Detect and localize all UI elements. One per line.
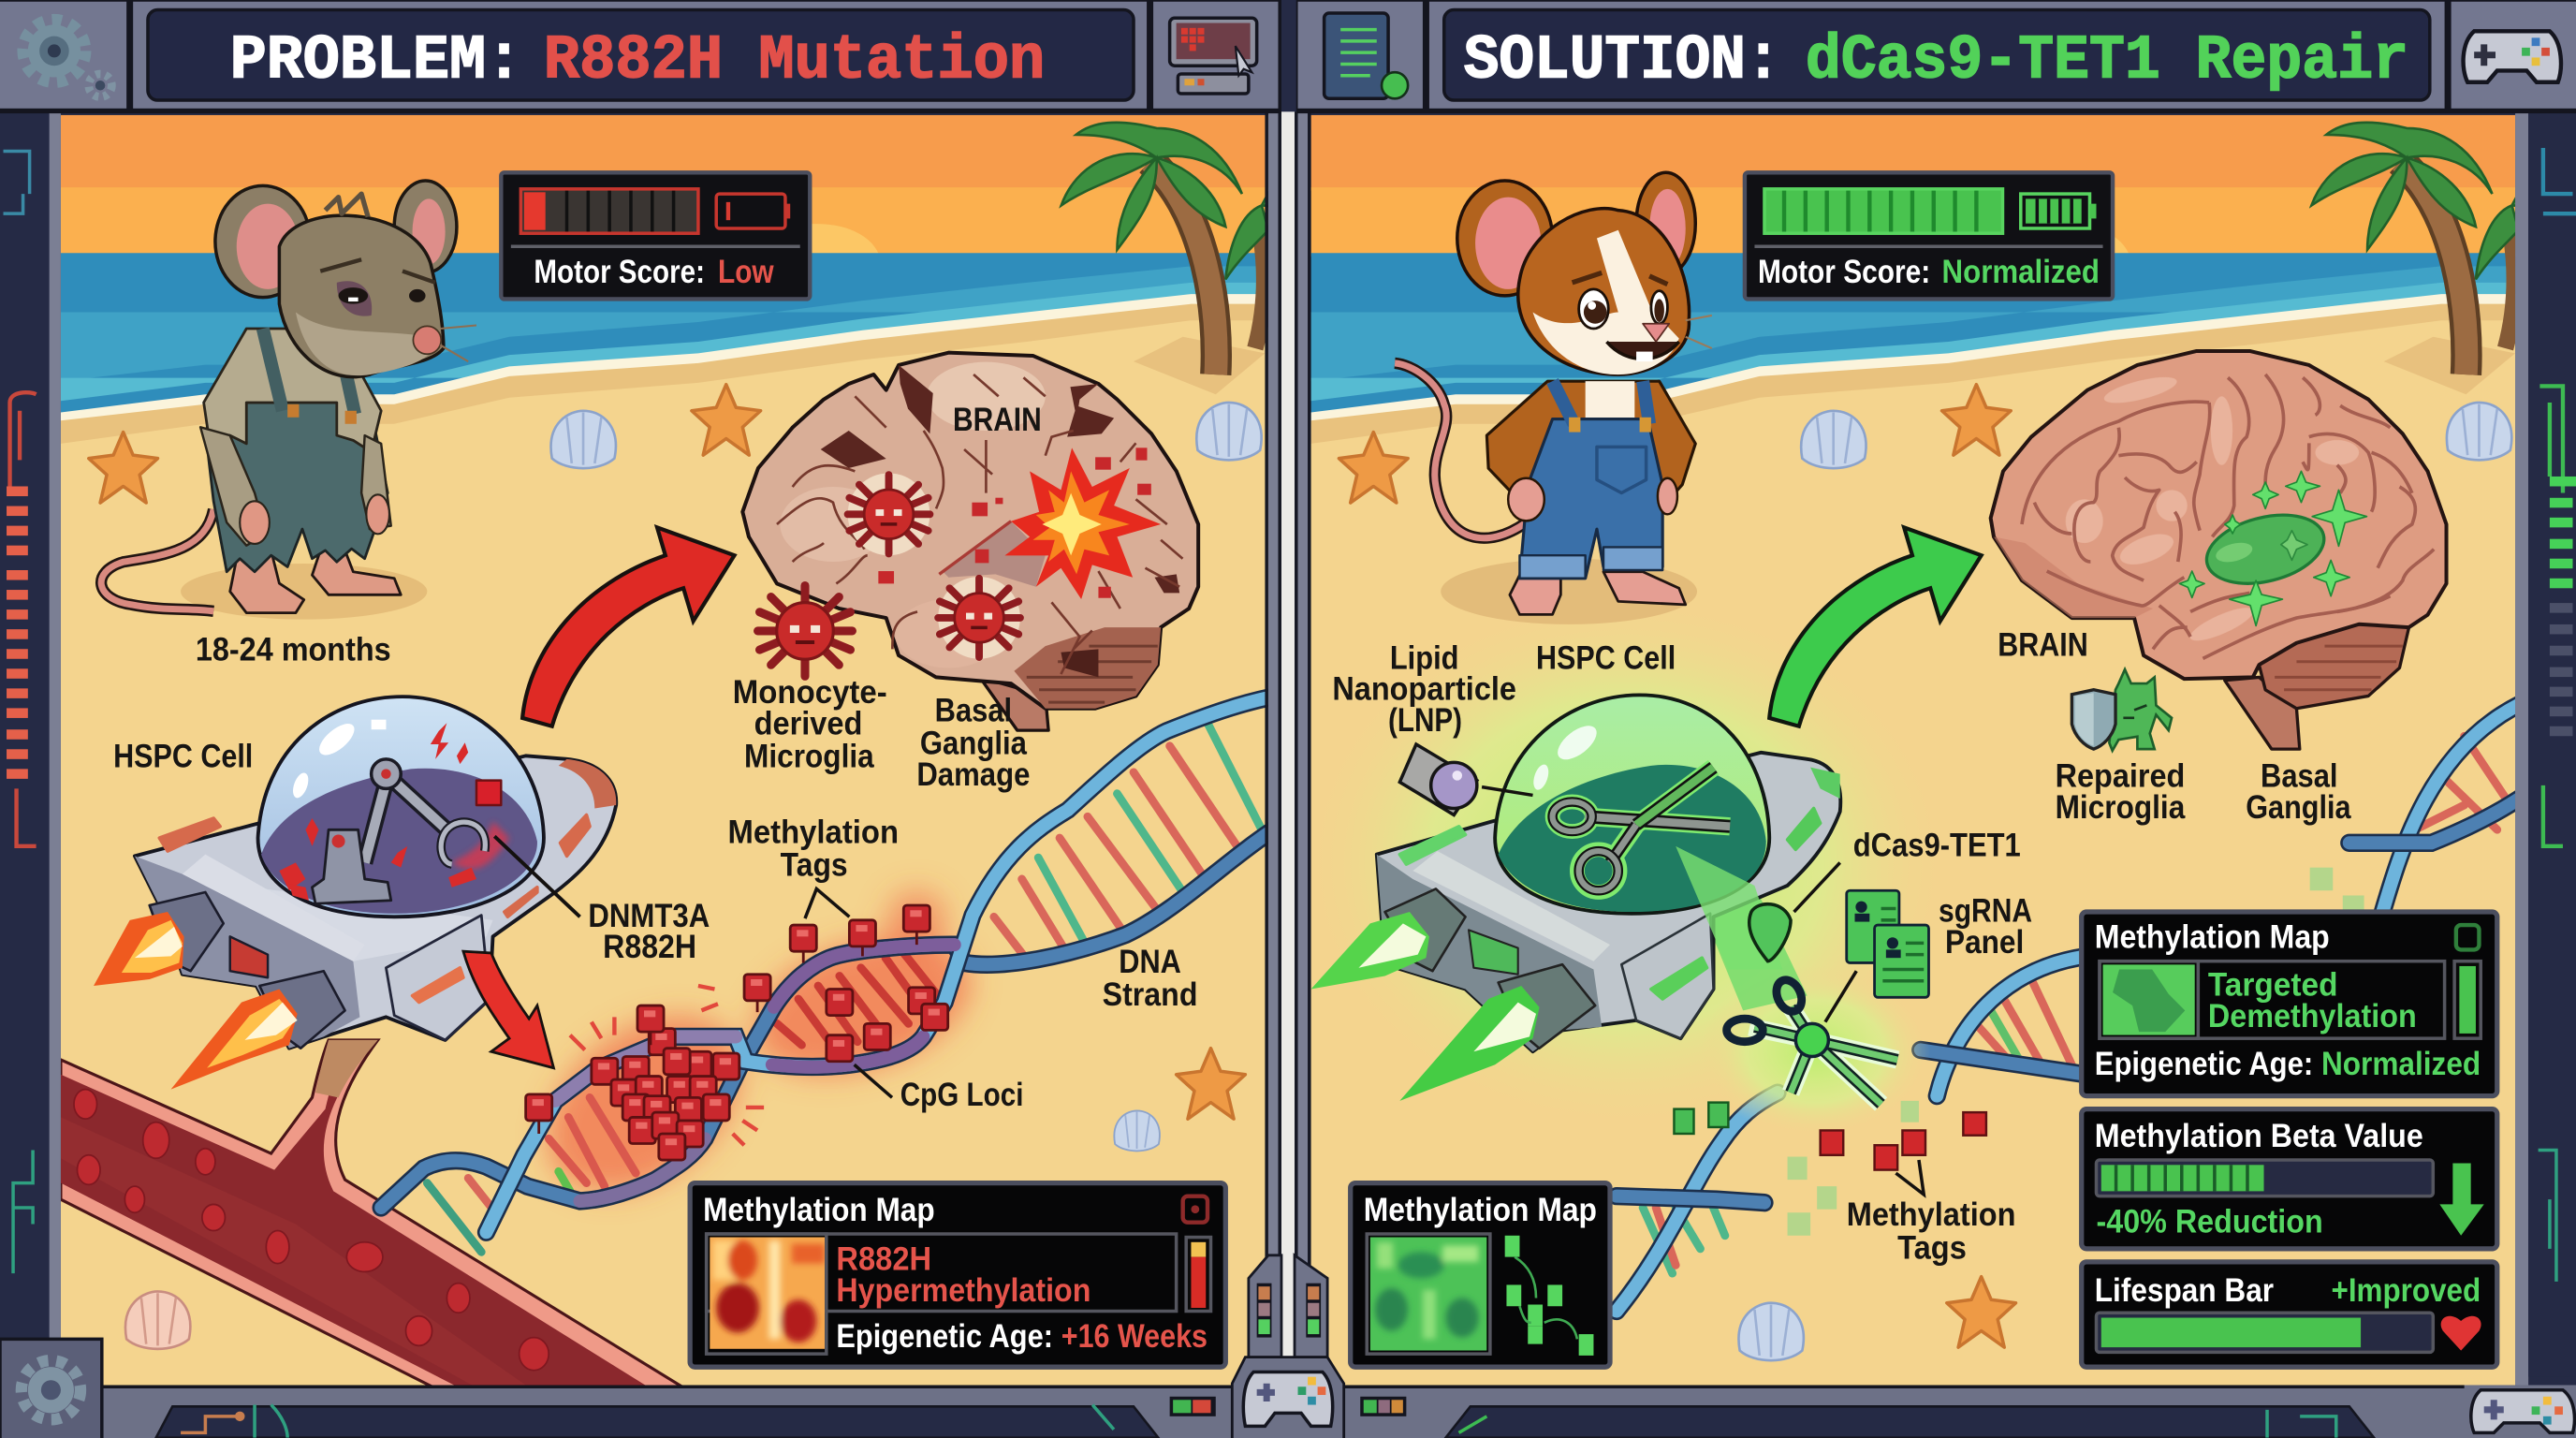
panel: methylation map problem: Hypermethylation: [836, 1272, 1090, 1309]
center divider: [1249, 111, 1327, 1390]
label: Repaired Microglia: Repaired: [2056, 758, 2185, 795]
brain damaged: [742, 353, 1198, 730]
methylation tags falling: [1674, 868, 2364, 1236]
right rail: [2515, 111, 2576, 1390]
title: solution: [1444, 10, 2430, 100]
label: sgRNA Panel with leader: [1825, 893, 2032, 1022]
panel: methylation map solution large: Normalized: [2321, 1046, 2481, 1082]
panel: methylation map problem: [690, 1183, 1225, 1367]
CpG methyl clusters: [526, 905, 948, 1160]
icon: microglia in brain: [758, 473, 1020, 676]
explosion: [1004, 448, 1161, 599]
decorations: beach items: [125, 1049, 1245, 1349]
icon: lipid nanoparticle: [1399, 744, 1477, 814]
arrow: ship to DNA: [463, 951, 553, 1068]
panel: methylation beta value: Methylation Beta Value: [2095, 1118, 2423, 1154]
label: Methylation Tags with leaders: Methylation: [1847, 1196, 2016, 1233]
panel: motor score normalized: Motor Score:: [1758, 254, 1930, 290]
label: Lipid Nanoparticle (LNP) with leader: Lipid: [1390, 639, 1459, 676]
label: Methylation Tags with leaders: [728, 814, 899, 918]
panel: lifespan bar: +Improved: [2331, 1272, 2481, 1309]
label: CpG Loci with leader: [855, 1064, 1023, 1113]
label: Repaired Microglia: Microglia: [2056, 789, 2186, 826]
DNA strand: [381, 697, 1273, 1252]
heatmap green: [1370, 1238, 1486, 1351]
label: dCas9-TET1 with leader: [1794, 827, 2021, 912]
label: Methylation Tags with leaders: Tags: [1897, 1229, 1967, 1266]
icon: dCas9 blob: [1749, 904, 1791, 961]
DNA strand repaired: [1617, 703, 2522, 1312]
left rail: [0, 111, 61, 1390]
panel: methylation beta value: -40% Reduction: [2097, 1203, 2323, 1240]
icon: repaired microglia with shield: [2071, 669, 2172, 751]
label: Basal Ganglia Damage: Ganglia: [920, 726, 1027, 762]
label: Repaired Microglia: [2056, 758, 2186, 826]
label: Monocyte-derived Microglia: derived: [754, 705, 862, 741]
icon: center gamepad: [1232, 1357, 1344, 1438]
label: DNMT3A R882H with leader: [494, 836, 710, 965]
title: problem: R882H Mutation: [544, 25, 1045, 96]
arrow: ship to brain: [1769, 527, 1982, 726]
green glow: [1380, 659, 1874, 1112]
panel: methylation map problem: +16 Weeks: [1061, 1318, 1208, 1355]
panel: motor score low: [501, 172, 810, 299]
label: sgRNA Panel with leader: Panel: [1945, 924, 2024, 961]
label: Basal Ganglia: Ganglia: [2246, 789, 2351, 826]
label: DNMT3A R882H with leader: DNMT3A: [588, 898, 710, 934]
panel: methylation map solution large: Epigenetic Age:: [2095, 1046, 2313, 1082]
icon: bottom right gamepad: [2465, 1385, 2576, 1438]
panel: motor score low: Motor Score:: [534, 254, 705, 290]
label: Basal Ganglia Damage: [916, 692, 1030, 793]
label: Lipid Nanoparticle (LNP) with leader: Nanoparticle: [1332, 671, 1516, 708]
label: Basal Ganglia: [2246, 758, 2351, 826]
old mouse: [101, 181, 476, 620]
label: Lipid Nanoparticle (LNP) with leader: (LNP): [1388, 702, 1462, 739]
title: problem: PROBLEM:: [230, 25, 522, 96]
icon: sgRNA cards: [1847, 890, 1928, 997]
icon: terminal: [1170, 18, 1257, 94]
label: Monocyte-derived Microglia: [733, 674, 887, 775]
panel: solution scene: [1298, 115, 2541, 1438]
label: dCas9-TET1 with leader: dCas9-TET1: [1853, 827, 2021, 863]
panel: methylation beta value: [2082, 1109, 2497, 1249]
label: Monocyte-derived Microglia: Microglia: [744, 739, 874, 775]
label: CpG Loci with leader: CpG Loci: [900, 1077, 1023, 1113]
label: Monocyte-derived Microglia: Monocyte-: [733, 674, 887, 711]
panel: lifespan bar: Lifespan Bar: [2095, 1272, 2274, 1309]
heatmap red: [710, 1238, 825, 1349]
label: HSPC Cell: HSPC Cell: [113, 739, 253, 775]
header bar left: problem: [0, 0, 1281, 113]
panel: methylation map solution small: Methylation Map: [1364, 1192, 1597, 1228]
label: DNA Strand: Strand: [1103, 976, 1197, 1013]
label: DNMT3A R882H with leader: R882H: [603, 929, 696, 965]
panel: motor score normalized: Normalized: [1942, 254, 2100, 290]
label: Methylation Tags with leaders: Methylation: [728, 814, 899, 850]
bottom bar: [0, 1385, 2576, 1438]
label: Lipid Nanoparticle (LNP) with leader: [1332, 639, 1533, 795]
panel: methylation map problem: R882H: [836, 1241, 931, 1278]
panel: methylation map solution large: [2082, 912, 2497, 1096]
icon: checklist document: [1325, 13, 1408, 98]
icon: gear: [23, 20, 111, 97]
header bar right: solution: [1296, 0, 2576, 113]
icon: dCas9 scissors tool: [1727, 976, 1897, 1104]
label: Basal Ganglia: Basal: [2261, 758, 2338, 795]
label: 18-24 months: 18-24 months: [196, 632, 391, 668]
label: BRAIN: BRAIN: [953, 402, 1042, 438]
brain healthy: [1991, 351, 2447, 749]
panel: methylation map problem: Methylation Map: [703, 1192, 935, 1228]
panel: methylation map solution large: Demethylation: [2208, 998, 2417, 1034]
tractor beam: [1676, 846, 1808, 1010]
panel: methylation map solution small: [1351, 1183, 1610, 1367]
label: Methylation Tags with leaders: [1847, 1160, 2016, 1266]
label: Basal Ganglia Damage: Basal: [935, 692, 1012, 728]
label: HSPC Cell: HSPC Cell: [1536, 639, 1676, 676]
icon: bottom gear: [0, 1339, 102, 1438]
heatmap repaired: [2103, 964, 2195, 1035]
ship: HSPC cell with robotic arm: [94, 697, 616, 1090]
title: problem: [148, 10, 1134, 100]
label: DNA Strand: DNA: [1119, 944, 1181, 980]
label: Basal Ganglia Damage: Damage: [916, 756, 1030, 793]
methylation glow: [514, 890, 988, 1228]
fresh mouse: [1395, 172, 1712, 624]
label: DNA Strand: [1103, 949, 1196, 1005]
label: Methylation Tags with leaders: Tags: [781, 846, 848, 883]
panel: methylation map solution large: Methylation Map: [2095, 919, 2330, 956]
title: solution: SOLUTION:: [1464, 25, 1781, 96]
panel: methylation map solution large: Targeted: [2208, 967, 2338, 1004]
panel: methylation map problem: Epigenetic Age:: [836, 1318, 1053, 1355]
arrow: ship to brain: [522, 527, 735, 726]
ship: HSPC cell with dCas9 scissors: [1311, 695, 1840, 1101]
panel: problem scene: [61, 115, 1292, 1438]
panel: lifespan bar: [2082, 1262, 2497, 1367]
label: BRAIN: BRAIN: [1998, 626, 2088, 663]
decorations: beach items: [1738, 1277, 2016, 1360]
panel: motor score normalized: [1745, 172, 2113, 299]
label: sgRNA Panel with leader: sgRNA: [1939, 893, 2032, 930]
panel: motor score low: Low: [718, 254, 774, 290]
artery: [61, 1040, 698, 1397]
title: solution: dCas9-TET1 Repair: [1806, 25, 2408, 96]
icon: header gamepad: [2464, 31, 2561, 82]
